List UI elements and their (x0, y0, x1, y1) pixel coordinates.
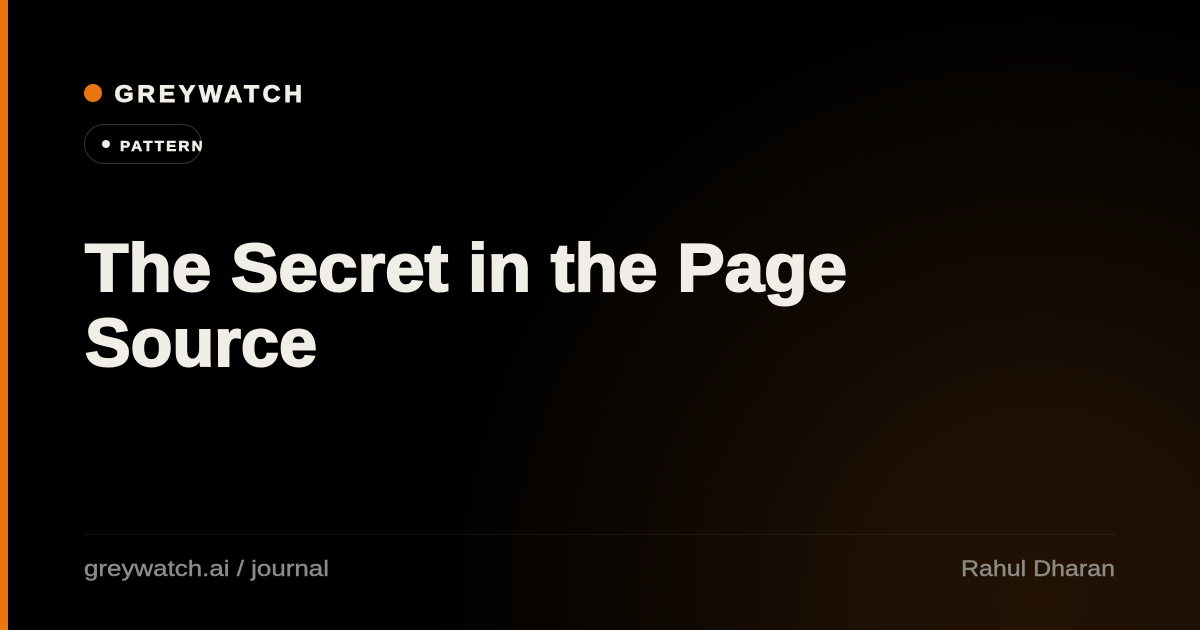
footer divider (84, 534, 1116, 535)
icon: orange dot (84, 84, 102, 102)
pill label: PATTERN (120, 138, 203, 155)
title: The Secret in the Page (85, 230, 847, 306)
title: Source (85, 305, 317, 381)
footer author: Rahul Dharan (961, 556, 1115, 581)
title (85, 230, 847, 381)
icon: pill dot (102, 140, 110, 148)
orange accent bar (0, 0, 8, 630)
category pill (84, 124, 203, 164)
footer site path: greywatch.ai / journal (84, 556, 329, 581)
brand name: GREYWATCH (114, 81, 302, 108)
brand logo (84, 81, 302, 108)
